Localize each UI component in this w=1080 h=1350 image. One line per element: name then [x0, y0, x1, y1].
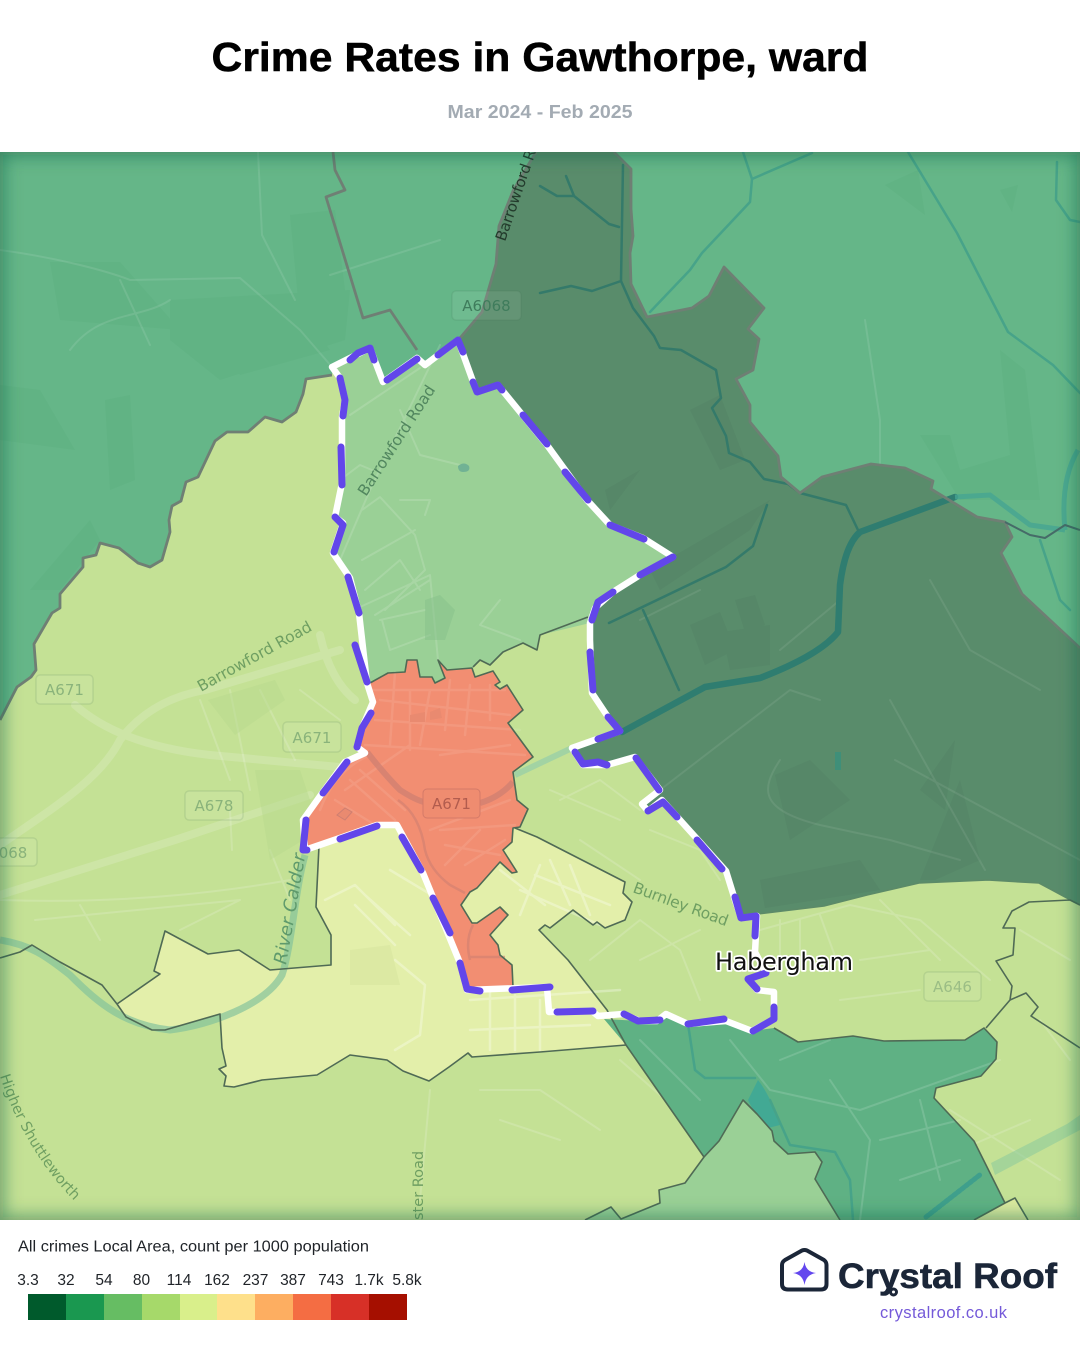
legend value labels: 743: [318, 1272, 344, 1289]
legend value labels: 32: [57, 1272, 75, 1289]
legend value labels: 3.3: [17, 1272, 39, 1289]
road shield: A646: A646: [933, 978, 972, 996]
road label: Barrowford Road north: Barrowford Road: [492, 122, 549, 243]
road shield: A671 west: A671: [45, 681, 84, 699]
road label: Barrowford Road in ward: Barrowford Road: [354, 382, 439, 499]
legend value labels: 1.7k: [354, 1272, 384, 1289]
region: south-eastern medium green: [604, 1014, 1005, 1220]
road label: Barrowford Road west: Barrowford Road: [194, 618, 315, 695]
road shield: A6068 clipped at map edge: [0, 838, 37, 866]
region: northern medium green: [0, 152, 1080, 720]
road shield: A646: [924, 972, 981, 1001]
legend colour scale: [28, 1294, 407, 1320]
legend value labels: 80: [133, 1272, 150, 1289]
road shield: A678: [185, 791, 243, 820]
road shield: A671 centre-west: [283, 722, 341, 752]
legend title: All crimes Local Area, count per 1000 population: [18, 1238, 369, 1256]
legend value labels: 387: [280, 1272, 306, 1289]
road shield: A6068: [452, 291, 521, 320]
region: high crime red area: [303, 660, 533, 988]
area boundary lines: [0, 152, 1080, 1220]
Gawthorpe ward outline: white and purple dashes: [303, 340, 774, 1031]
road label: clipped Manchester Road: ster Road: [411, 1151, 427, 1220]
logo: Crystal Roof: [782, 1250, 1057, 1322]
region: southern central lighter yellow-green: [117, 825, 632, 1087]
title: Crime Rates in Gawthorpe, ward: [212, 34, 868, 80]
place label: Habergham: Habergham: [715, 948, 853, 976]
road label: Burnley Road: Burnley Road: [631, 879, 731, 930]
river Calder: [0, 748, 572, 1030]
region: right-hand green-yellow strip: [974, 1115, 1080, 1220]
region: low-crime dark green area: [458, 152, 1080, 918]
region: southern light green patch: [585, 1100, 840, 1220]
road shield: A6068: A6068: [462, 297, 511, 315]
website url: crystalroof.co.uk: [880, 1304, 1008, 1322]
wordmark: Crystal Roof: [838, 1257, 1057, 1296]
legend value labels: [17, 1272, 422, 1289]
river label: River Calder: River Calder: [270, 850, 311, 966]
icon: house with star: [782, 1250, 826, 1290]
road shield: A678: A678: [195, 797, 233, 815]
subtitle: date range: Mar 2024 - Feb 2025: [448, 101, 632, 122]
road shield: A671 in red area: A671: [432, 795, 471, 813]
road shield: A671 west: [36, 675, 93, 704]
legend value labels: 237: [243, 1272, 268, 1289]
legend value labels: 54: [95, 1272, 113, 1289]
road shield: A671 centre-west: A671: [293, 729, 331, 747]
main roads on the west side: [0, 635, 1070, 1200]
legend value labels: 5.8k: [392, 1272, 422, 1289]
legend: [17, 1238, 422, 1320]
region: Gawthorpe ward upper area, light green: [333, 340, 673, 695]
legend value labels: 162: [204, 1272, 230, 1289]
road shield: A671 in red area: [423, 789, 480, 818]
rivers and streams: [540, 152, 1080, 770]
legend value labels: 114: [167, 1272, 192, 1289]
